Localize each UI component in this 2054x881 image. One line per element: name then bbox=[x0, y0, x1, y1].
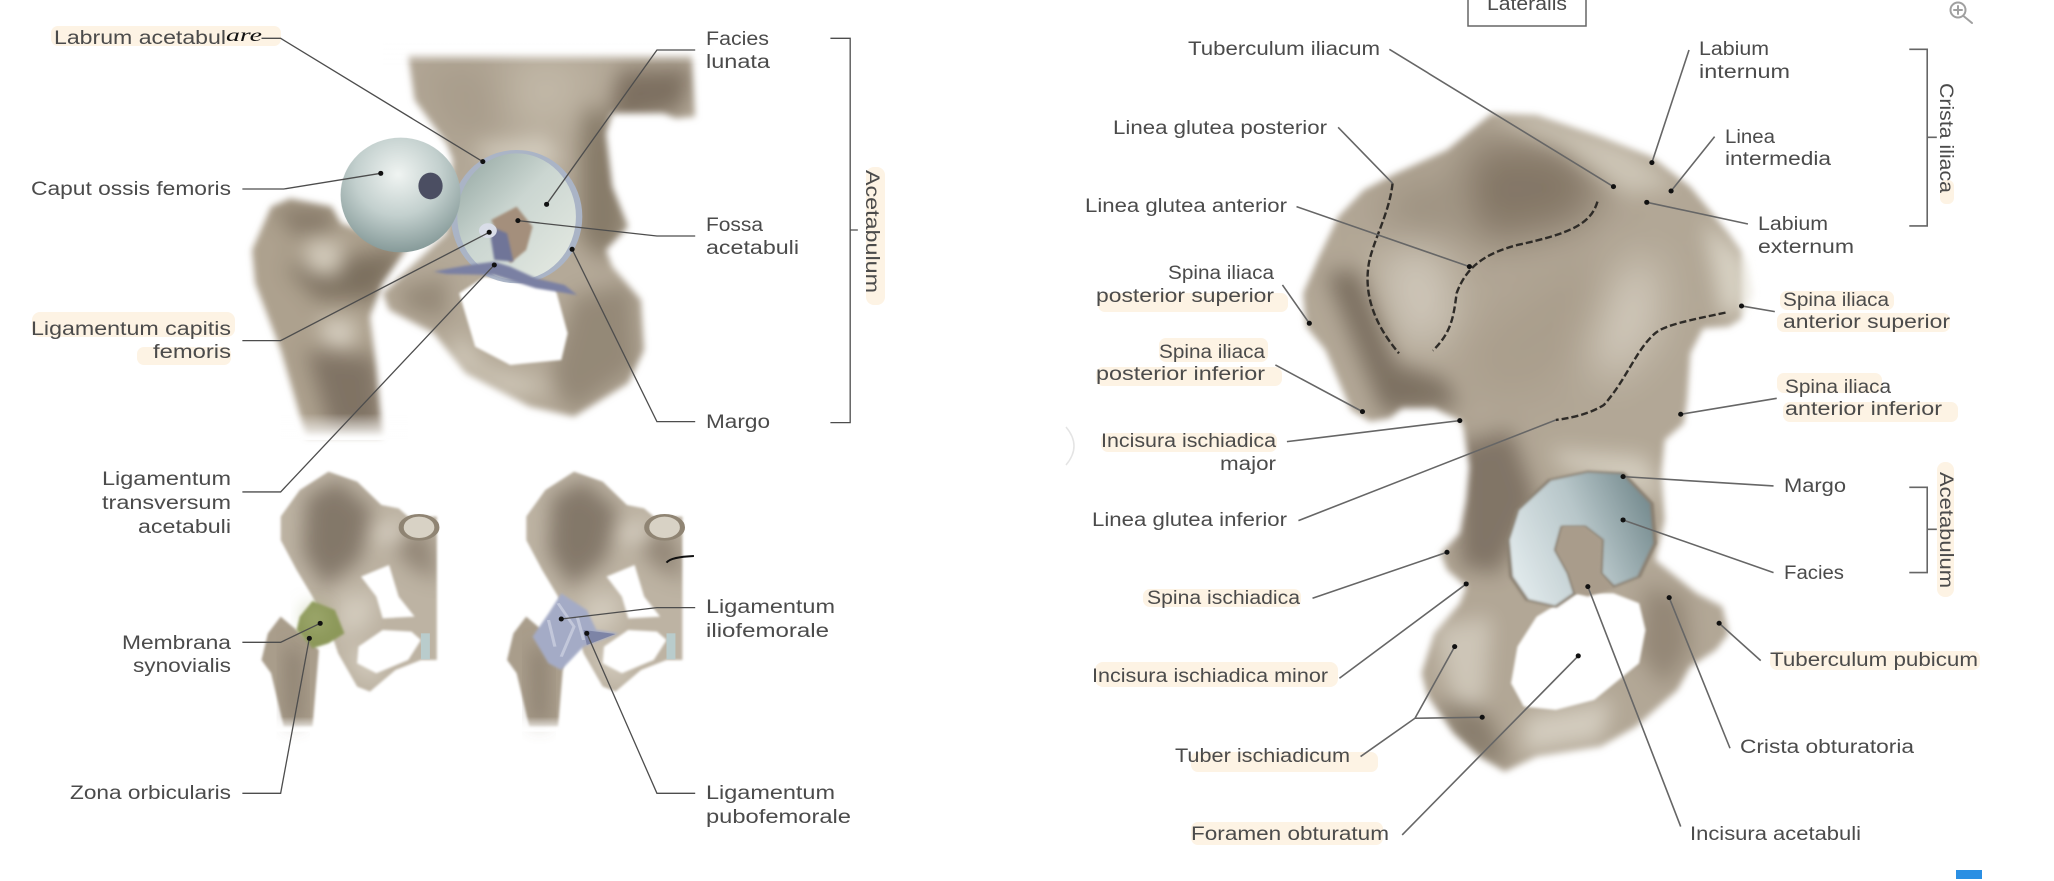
label: Spina iliaca posterior inferior: Spina iliaca bbox=[1159, 342, 1265, 363]
label: Ligamentum capitis femoris: Ligamentum capitis bbox=[31, 319, 231, 340]
label: Membrana synovialis: synovialis bbox=[133, 656, 231, 677]
label: Linea glutea posterior: Linea glutea posterior bbox=[1113, 118, 1328, 139]
label: Fossa acetabuli: Fossa bbox=[706, 215, 763, 236]
leader lines: lower illustrations bbox=[242, 608, 695, 793]
label: Incisura acetabuli: Incisura acetabuli bbox=[1690, 824, 1861, 845]
label: Facies right: Facies bbox=[1784, 563, 1844, 584]
label: Spina iliaca anterior inferior bbox=[1785, 377, 1943, 420]
label: Spina iliaca posterior superior: Spina iliaca bbox=[1168, 263, 1274, 284]
label: Incisura ischiadica major bbox=[1101, 431, 1277, 475]
label: Spina iliaca anterior superior: Spina iliaca bbox=[1783, 290, 1889, 311]
illustration: pelvis with acetabulum bbox=[370, 50, 702, 423]
label: Ligamentum capitis femoris: femoris bbox=[153, 342, 231, 363]
label: Linea glutea anterior: Linea glutea anterior bbox=[1085, 196, 1288, 217]
bracket: Crista iliaca bbox=[1909, 49, 1937, 226]
label: Facies lunata: lunata bbox=[706, 52, 771, 73]
label: Incisura ischiadica major: Incisura ischiadica bbox=[1101, 431, 1276, 452]
illustration: hip bone bbox=[1293, 110, 1751, 777]
label: Labium externum: externum bbox=[1758, 237, 1854, 258]
label: Spina iliaca posterior superior: posterior superior bbox=[1096, 286, 1275, 307]
handwritten pen mark bbox=[667, 556, 694, 563]
label: Linea intermedia: Linea bbox=[1725, 127, 1775, 148]
label: Incisura ischiadica major: major bbox=[1220, 454, 1277, 475]
marker: blue corner tab bbox=[1956, 870, 1982, 879]
label: Spina iliaca posterior inferior: posterior inferior bbox=[1096, 364, 1266, 385]
label: Ligamentum transversum acetabuli bbox=[102, 469, 231, 538]
label: Tuberculum iliacum: Tuberculum iliacum bbox=[1188, 39, 1380, 60]
label: Ligamentum iliofemorale: iliofemorale bbox=[706, 621, 829, 642]
icon: zoom magnifier bbox=[1950, 2, 1972, 23]
dashed gluteal lines bbox=[1368, 183, 1726, 420]
label: Labium externum bbox=[1758, 214, 1854, 258]
label: Ligamentum iliofemorale: Ligamentum bbox=[706, 597, 835, 618]
label: Tuber ischiadicum: Tuber ischiadicum bbox=[1175, 746, 1350, 767]
label: Spina iliaca anterior inferior: anterior inferior bbox=[1785, 399, 1943, 420]
label: Ligamentum pubofemorale: pubofemorale bbox=[706, 807, 851, 828]
label: Incisura ischiadica minor: Incisura ischiadica minor bbox=[1092, 666, 1329, 687]
label: Labrum acetabulare: are bbox=[226, 25, 262, 45]
panel: hip joint main illustration bbox=[242, 40, 714, 440]
panel: lateral view of os coxae bbox=[1293, 110, 1751, 777]
leader lines: lateral view bbox=[1275, 49, 1777, 835]
label: Spina iliaca posterior inferior bbox=[1096, 342, 1266, 385]
transverse ligament bbox=[434, 262, 577, 295]
bracket: Acetabulum right bbox=[1909, 487, 1937, 573]
facies lunata bbox=[1508, 472, 1655, 607]
bracket: Acetabulum left bbox=[830, 38, 858, 423]
incisura acetabuli surface bbox=[1556, 527, 1613, 597]
label: Fossa acetabuli: acetabuli bbox=[706, 238, 799, 259]
label: Linea intermedia: intermedia bbox=[1725, 149, 1832, 170]
label: Membrana synovialis: Membrana bbox=[122, 633, 232, 654]
label: Labium internum: internum bbox=[1699, 62, 1790, 83]
label: Foramen obturatum: Foramen obturatum bbox=[1191, 824, 1389, 845]
illustration: hip with iliofemoral ligaments bbox=[507, 467, 694, 732]
label: Labium internum bbox=[1699, 39, 1790, 83]
label: Zona orbicularis: Zona orbicularis bbox=[70, 783, 231, 804]
label: Fossa acetabuli bbox=[706, 215, 799, 259]
label: Ligamentum pubofemorale: Ligamentum bbox=[706, 783, 835, 804]
label: Labium internum: Labium bbox=[1699, 39, 1769, 60]
label: Margo: Margo bbox=[706, 412, 770, 433]
label: Caput ossis femoris: Caput ossis femoris bbox=[31, 179, 231, 200]
illustration: femur bbox=[242, 193, 421, 440]
label: Ligamentum capitis femoris bbox=[31, 319, 231, 363]
label: Ligamentum pubofemorale bbox=[706, 783, 851, 828]
label: Ligamentum transversum acetabuli: acetabuli bbox=[138, 517, 231, 538]
illustration: hip with membrana synovialis bbox=[261, 467, 446, 732]
leader lines: main hip illustration bbox=[242, 38, 695, 492]
label: Spina iliaca posterior superior bbox=[1096, 263, 1275, 307]
label: Margo right: Margo bbox=[1784, 476, 1846, 497]
label: Ligamentum transversum acetabuli: Ligamentum bbox=[102, 469, 231, 490]
label: Labrum acetabulare: Labrum acetabul bbox=[54, 28, 226, 49]
box: Lateralis bbox=[1468, 0, 1586, 26]
label: Linea intermedia bbox=[1725, 127, 1832, 170]
foramen obturatum bbox=[1511, 593, 1645, 710]
faint page arc bbox=[1066, 427, 1074, 465]
label: Ligamentum transversum acetabuli: transversum bbox=[102, 493, 231, 514]
label: Labium externum: Labium bbox=[1758, 214, 1828, 235]
label: Acetabulum vertical right: Acetabulum bbox=[1935, 472, 1956, 588]
label: Spina iliaca anterior superior: anterior superior bbox=[1783, 312, 1951, 333]
label: Facies lunata: Facies bbox=[706, 29, 769, 50]
label: Spina ischiadica: Spina ischiadica bbox=[1147, 588, 1300, 609]
label: Crista iliaca vertical: Crista iliaca bbox=[1935, 83, 1956, 193]
label: Membrana synovialis bbox=[122, 633, 232, 677]
label: Spina iliaca anterior superior bbox=[1783, 290, 1951, 333]
label: Crista obturatoria: Crista obturatoria bbox=[1740, 737, 1915, 758]
label: Facies lunata bbox=[706, 29, 771, 73]
illustration: femoral head bbox=[341, 138, 460, 252]
panel: lower illustrations bbox=[261, 467, 694, 732]
label: Spina iliaca anterior inferior: Spina iliaca bbox=[1785, 377, 1891, 398]
label: Linea glutea inferior: Linea glutea inferior bbox=[1092, 510, 1288, 531]
label: Acetabulum vertical: Acetabulum bbox=[861, 170, 882, 293]
label: Ligamentum iliofemorale bbox=[706, 597, 835, 642]
label: Tuberculum pubicum: Tuberculum pubicum bbox=[1770, 650, 1978, 671]
label: Labrum acetabulare bbox=[54, 25, 262, 49]
